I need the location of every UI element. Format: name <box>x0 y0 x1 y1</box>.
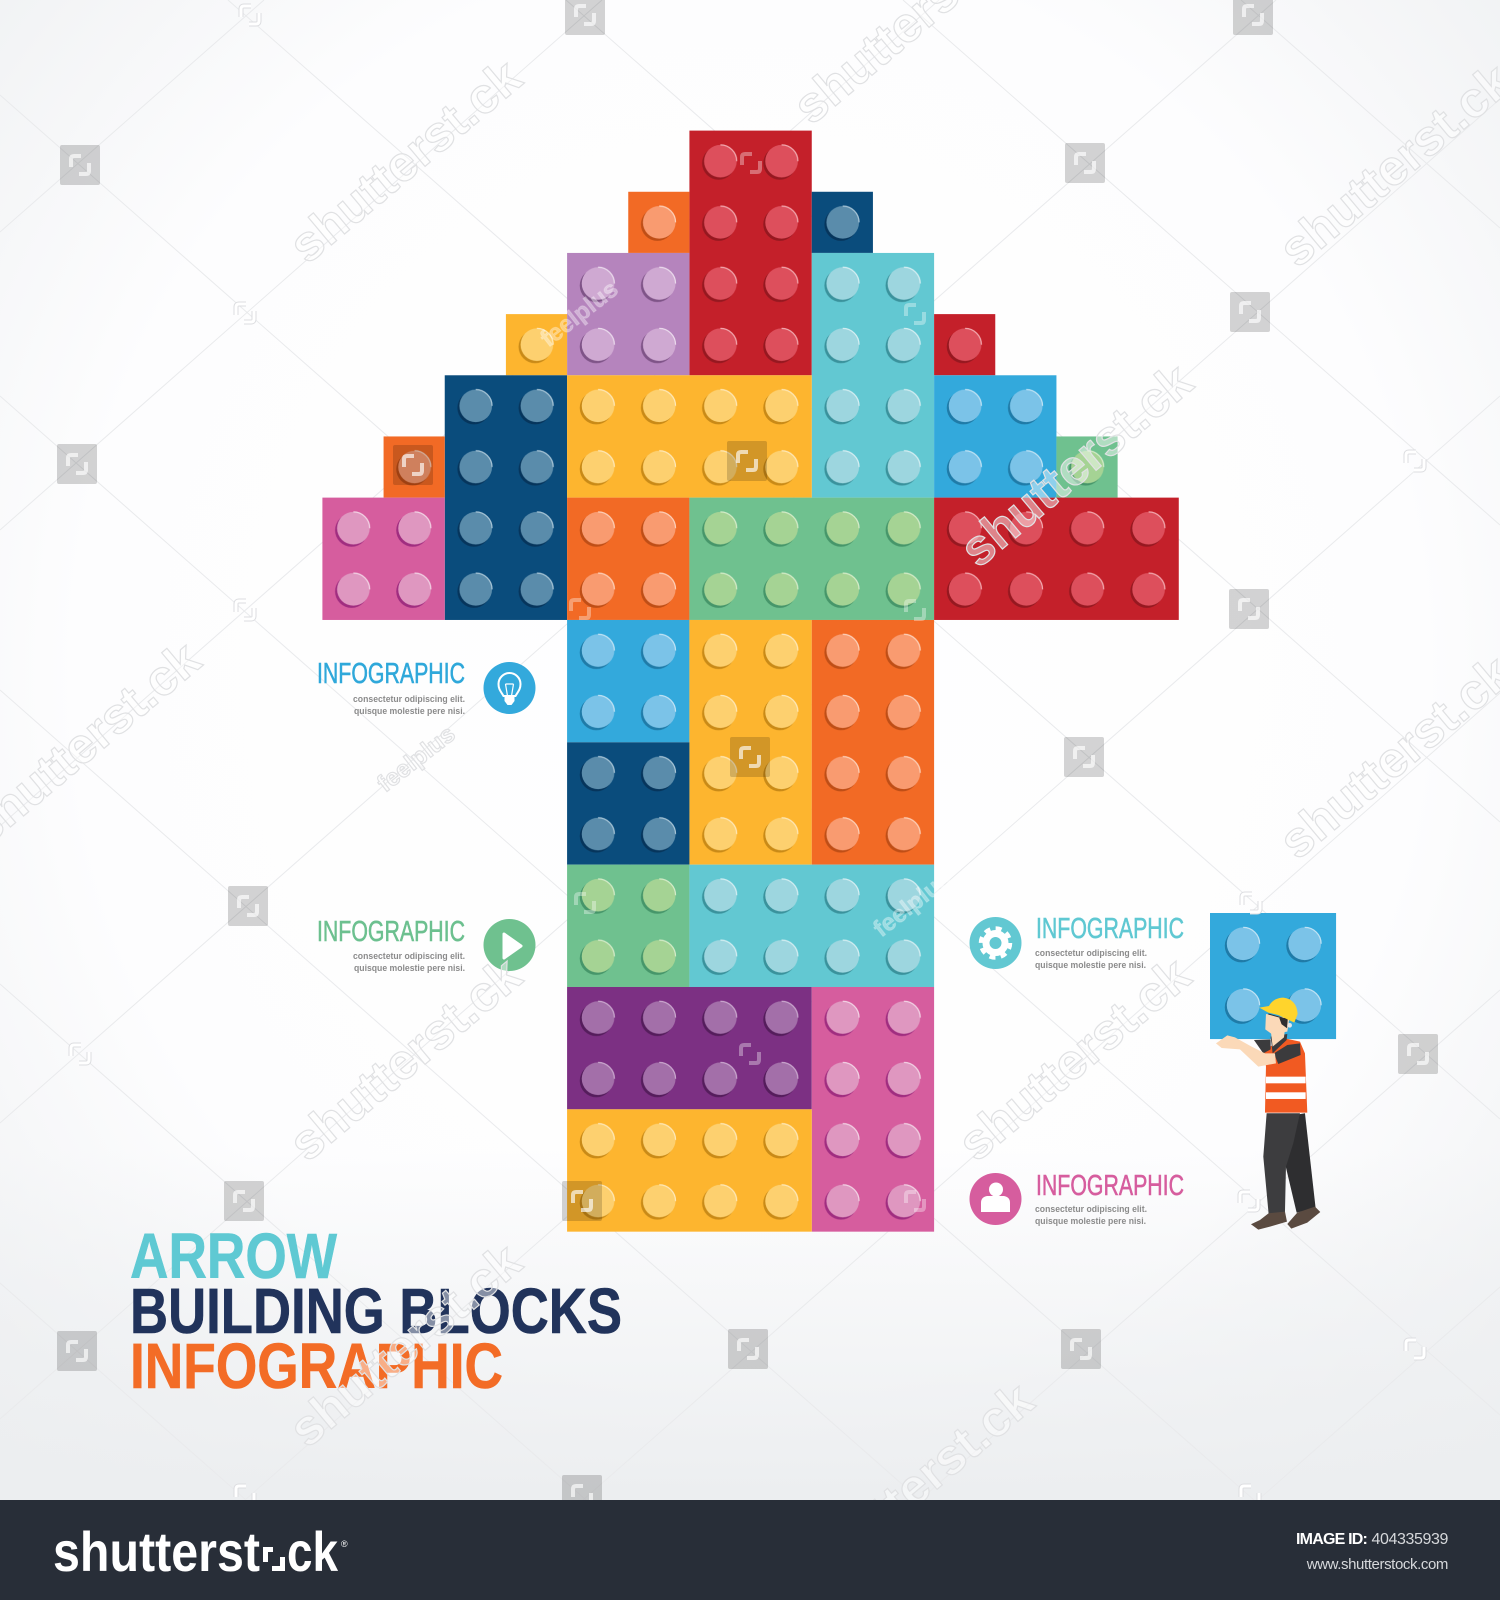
block: orange single <box>628 192 689 253</box>
label: lower right infographic (pink): quisque molestie pere nisi. <box>1035 1216 1146 1227</box>
block: red tip column <box>689 131 812 375</box>
title: BUILDING BLOCKS <box>130 1275 622 1347</box>
block: green wide <box>689 498 934 620</box>
label: lower right infographic (pink): INFOGRAPHIC <box>1036 1170 1184 1202</box>
block: lilac <box>567 253 689 375</box>
block: red single <box>934 314 995 375</box>
loose blue block carried by worker <box>1210 913 1336 1039</box>
label: left infographic (green) <box>317 916 465 974</box>
label: left infographic (green): INFOGRAPHIC <box>317 916 465 948</box>
label: left infographic (green): quisque molestie pere nisi. <box>354 963 465 974</box>
block: green small right <box>1056 436 1118 498</box>
block: yellow wide <box>567 375 812 498</box>
icon: light bulb <box>484 662 536 714</box>
footer logo: ® <box>341 1539 348 1549</box>
arrow built from blocks <box>322 131 1179 1232</box>
footer logo: shutterst <box>53 1520 260 1583</box>
footer image id: IMAGE ID: 404335939 <box>1296 1531 1448 1548</box>
block: yellow shaft column <box>689 620 812 865</box>
safety vest <box>1264 1038 1307 1113</box>
label: right infographic (teal): INFOGRAPHIC <box>1036 913 1184 945</box>
footer url: www.shutterstock.com <box>1306 1556 1448 1573</box>
watermark overlay: shutterst.ck <box>279 1232 532 1458</box>
label: left infographic (green): consectetur odipiscing elit. <box>353 951 465 962</box>
label: right infographic (teal): quisque molestie pere nisi. <box>1035 960 1146 971</box>
block: orange centre <box>567 498 689 620</box>
block: red right wing <box>934 498 1179 620</box>
watermark overlay: feelplus <box>868 866 956 943</box>
label: right infographic (teal): consectetur odipiscing elit. <box>1035 948 1147 959</box>
icon: gear <box>970 917 1022 969</box>
footer bar <box>0 1500 1500 1600</box>
block: yellow single <box>506 314 567 375</box>
watermark overlay: feelplus <box>372 721 460 798</box>
watermark overlay: shutterst.ck <box>279 946 532 1172</box>
footer logo: ck <box>287 1520 339 1583</box>
head and helmet <box>1259 998 1298 1034</box>
worker carrying block <box>1216 998 1320 1230</box>
block: violet wide <box>567 987 812 1109</box>
label: top left infographic (blue) <box>317 658 465 717</box>
block: green shaft <box>567 865 689 987</box>
label: lower right infographic (pink): consectetur odipiscing elit. <box>1035 1204 1147 1215</box>
watermark overlay: feelplus <box>535 276 623 353</box>
arm and hand <box>1216 1035 1276 1067</box>
title <box>130 1220 622 1402</box>
block: orange shaft column <box>812 620 934 865</box>
label: top left infographic (blue): consectetur odipiscing elit. <box>353 694 465 705</box>
block: pink left wing <box>322 498 445 620</box>
block: orange small left <box>384 436 445 498</box>
title: INFOGRAPHIC <box>130 1330 503 1402</box>
watermark overlay: shutterst.ck <box>950 352 1203 578</box>
icon: play <box>484 919 536 971</box>
block: navy shaft <box>567 742 689 865</box>
shirt and neck <box>1254 1029 1301 1064</box>
block: blue <box>934 375 1056 498</box>
boots <box>1251 1207 1320 1230</box>
block: teal wide shaft <box>689 865 934 987</box>
block: navy column <box>445 375 567 620</box>
icon: person <box>970 1173 1022 1225</box>
watermark overlay: shutterst.ck <box>948 946 1201 1172</box>
label: top left infographic (blue): INFOGRAPHIC <box>317 658 465 690</box>
watermark overlay: shutterst.ck <box>791 1371 1044 1597</box>
block: navy single <box>812 192 873 253</box>
label: top left infographic (blue): quisque molestie pere nisi. <box>354 706 465 717</box>
label: right infographic (teal) <box>1035 913 1184 971</box>
trousers <box>1263 1113 1316 1214</box>
label: lower right infographic (pink) <box>1035 1170 1184 1227</box>
block: blue shaft <box>567 620 689 742</box>
block: teal column <box>812 253 934 498</box>
title: ARROW <box>130 1220 337 1292</box>
block: yellow base <box>567 1109 812 1232</box>
watermark overlay: shutterst.ck <box>279 48 532 274</box>
block: pink column <box>812 987 934 1232</box>
